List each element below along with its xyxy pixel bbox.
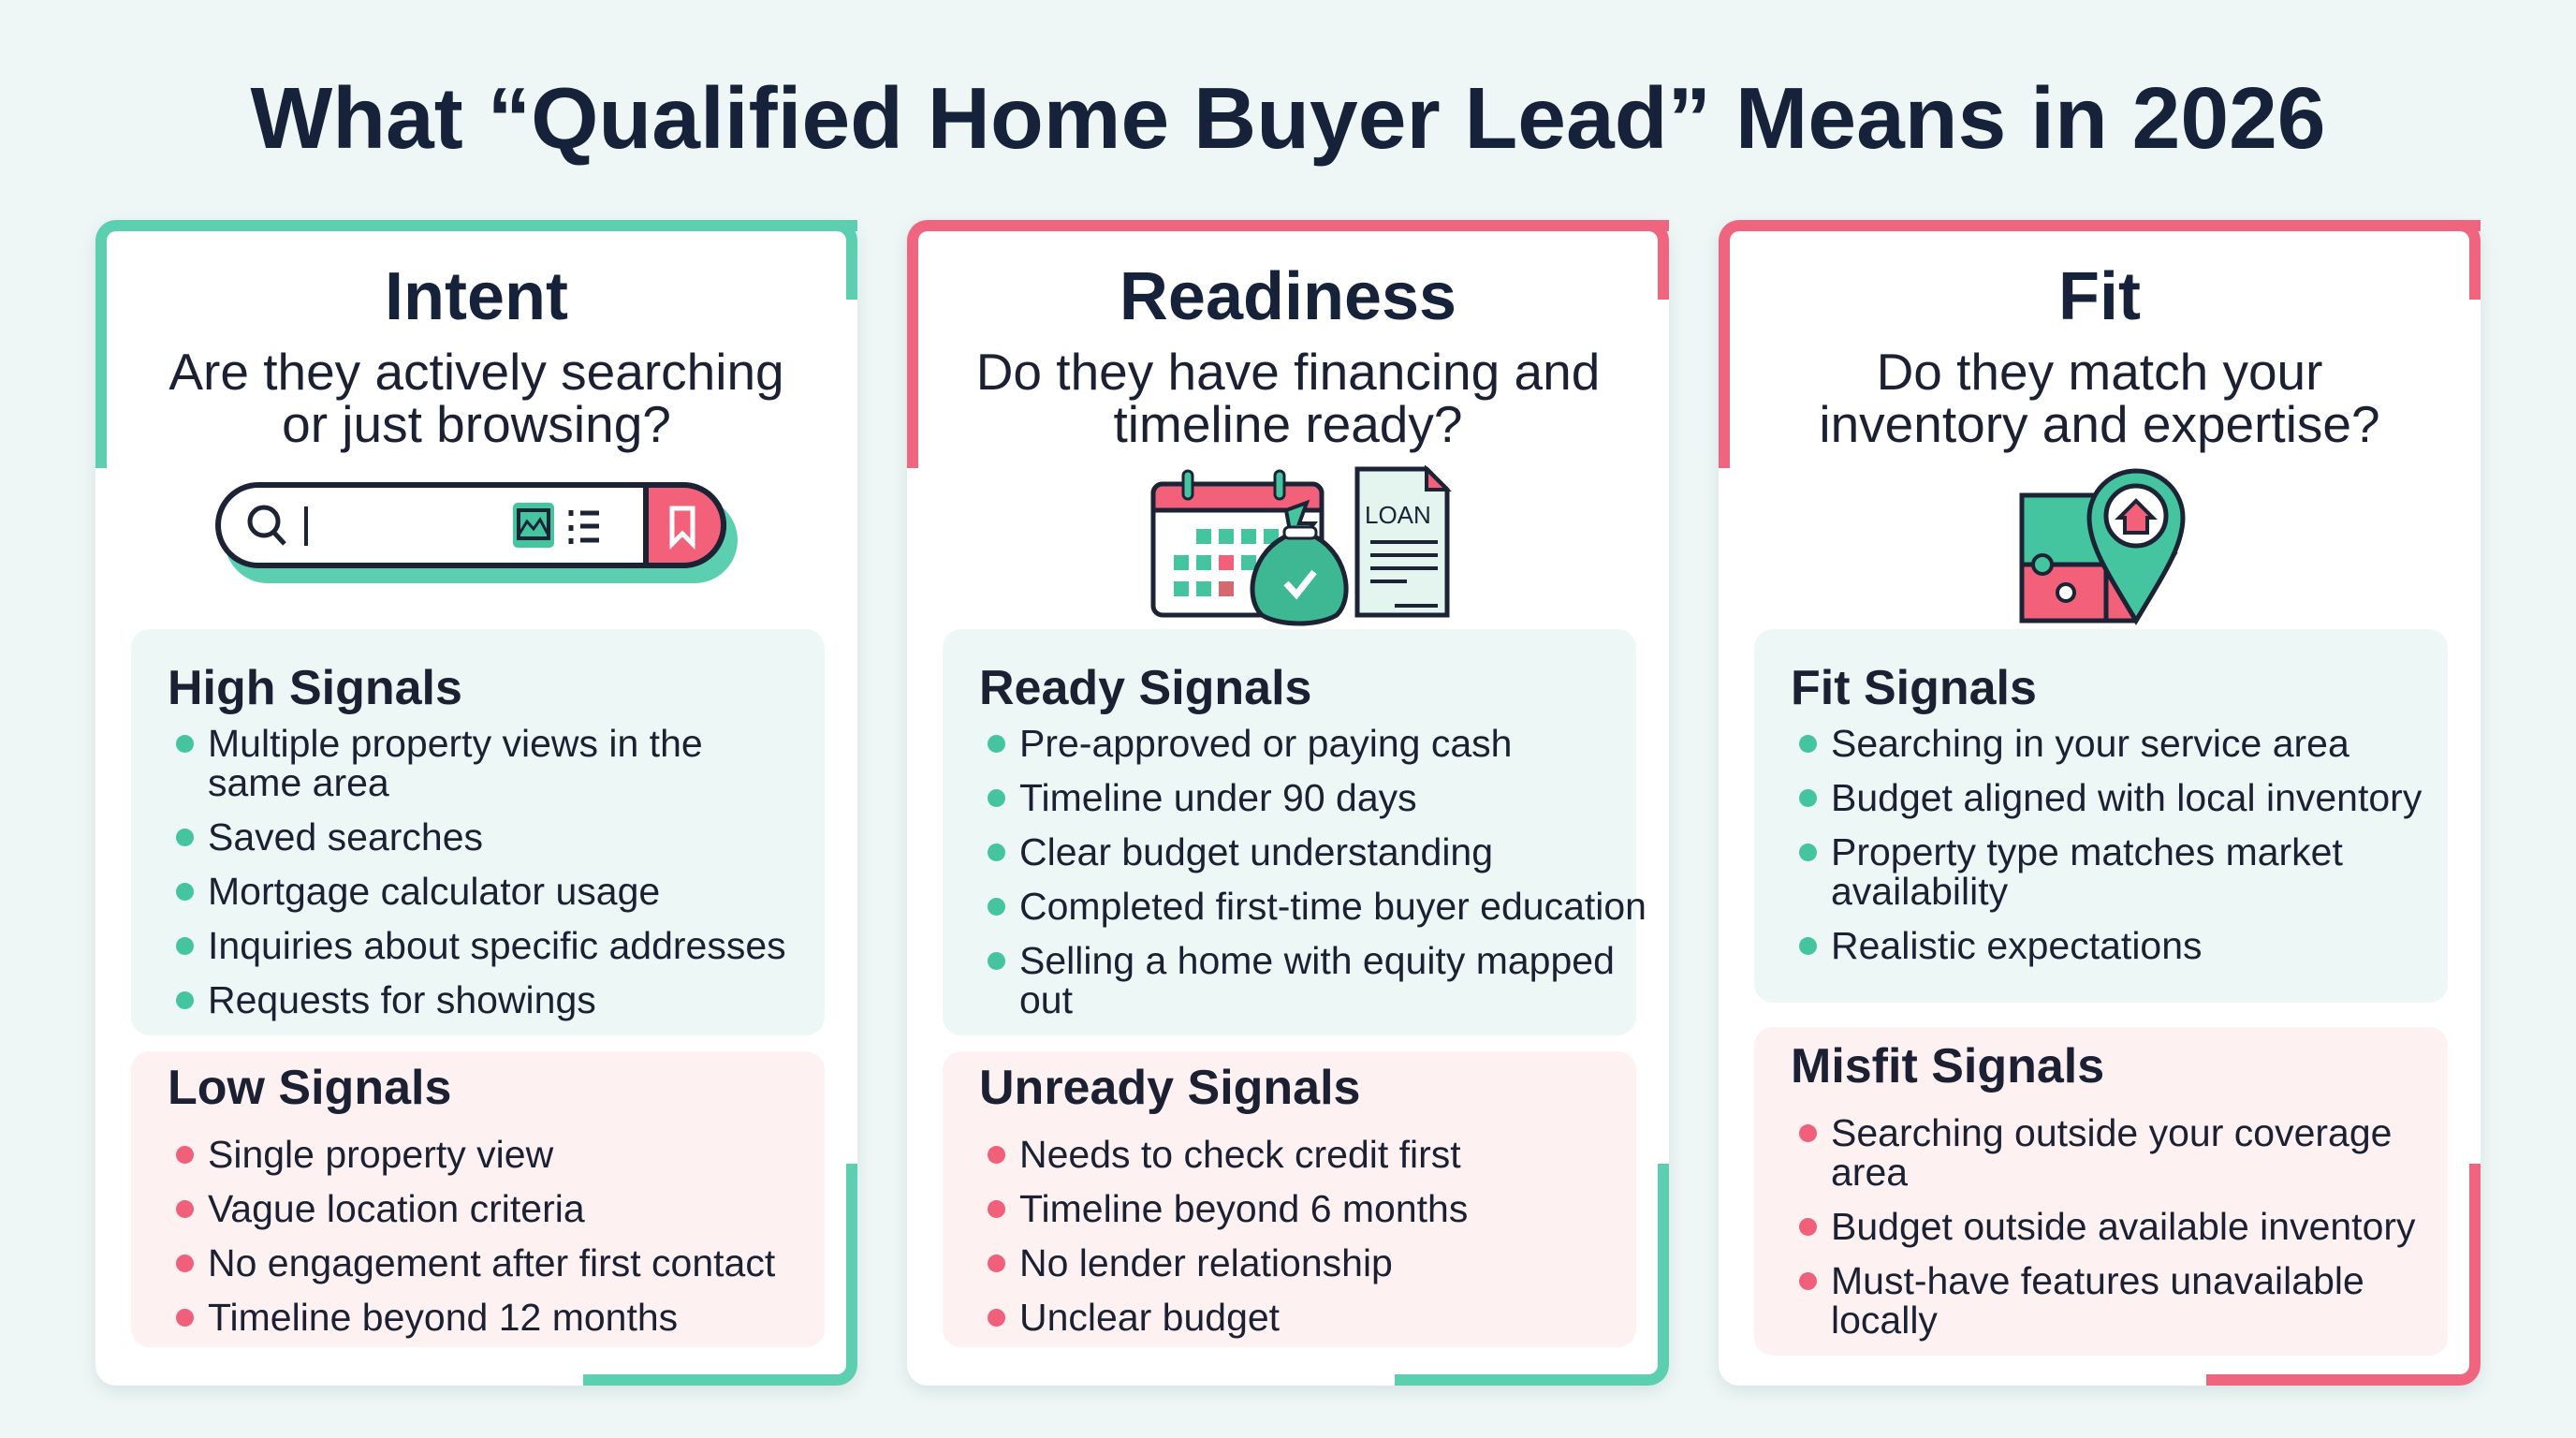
box: low signals: Vague location criteria	[208, 1187, 585, 1230]
box: high signals: Inquiries about specific addresses	[208, 924, 786, 967]
subtitle: fit: inventory and expertise?	[1819, 395, 2380, 453]
box: low signals: Low Signals	[168, 1061, 451, 1115]
subtitle: readiness	[976, 343, 1600, 453]
subtitle: readiness: Do they have financing and	[976, 343, 1600, 401]
icon: puzzle and location pin	[2020, 468, 2185, 625]
panel: fit	[1719, 220, 2481, 1386]
box: low signals: Timeline beyond 12 months	[208, 1296, 678, 1339]
subtitle: fit: Do they match your	[1877, 343, 2322, 401]
icon: calendar, money bag, loan: LOAN	[1365, 501, 1431, 529]
box: fit signals: Fit Signals	[1791, 661, 2037, 715]
subtitle: intent: Are they actively searching	[168, 343, 784, 401]
box: high signals: High Signals	[168, 661, 462, 715]
box: high signals: Multiple property views in the	[208, 722, 703, 765]
box: high signals	[131, 629, 825, 1035]
box: low signals: No engagement after first contact	[208, 1241, 775, 1284]
title: What “Qualified Home Buyer Lead” Means in 2026	[250, 69, 2326, 167]
box: misfit signals: area	[1831, 1151, 1908, 1194]
box: fit signals	[1754, 629, 2448, 1003]
box: high signals: Requests for showings	[208, 978, 596, 1021]
box: unready signals: Needs to check credit first	[1019, 1133, 1461, 1176]
subtitle: intent: or just browsing?	[282, 395, 671, 453]
box: unready signals: No lender relationship	[1019, 1241, 1393, 1284]
box: ready signals: Selling a home with equity mapped	[1019, 939, 1615, 982]
box: unready signals: Unready Signals	[979, 1061, 1360, 1115]
subtitle: fit	[1819, 343, 2380, 453]
box: fit signals: Property type matches market	[1831, 830, 2343, 873]
box: ready signals: Clear budget understanding	[1019, 830, 1493, 873]
box: high signals: Saved searches	[208, 815, 483, 858]
panel: intent	[95, 220, 857, 1386]
box: misfit signals: locally	[1831, 1299, 1938, 1342]
box: fit signals: Searching in your service area	[1831, 722, 2349, 765]
icon: calendar, money bag, loan	[1151, 465, 1452, 625]
panel: readiness	[907, 220, 1669, 1386]
box: unready signals: Unclear budget	[1019, 1296, 1280, 1339]
box: unready signals: Timeline beyond 6 months	[1019, 1187, 1468, 1230]
box: unready signals	[943, 1051, 1636, 1347]
icon: search bar	[215, 482, 738, 583]
subtitle: readiness: timeline ready?	[1114, 395, 1462, 453]
heading: fit: Fit	[2058, 259, 2141, 334]
box: ready signals: Ready Signals	[979, 661, 1311, 715]
box: misfit signals: Budget outside available inventory	[1831, 1205, 2416, 1248]
box: ready signals: out	[1019, 978, 1073, 1021]
box: ready signals: Completed first-time buyer education	[1019, 885, 1647, 928]
box: ready signals	[943, 629, 1636, 1035]
box: misfit signals: Searching outside your coverage	[1831, 1111, 2392, 1154]
subtitle: intent	[168, 343, 784, 453]
box: fit signals: Budget aligned with local inventory	[1831, 776, 2422, 819]
box: low signals	[131, 1051, 825, 1347]
box: ready signals: Pre-approved or paying cash	[1019, 722, 1512, 765]
box: high signals: same area	[208, 761, 389, 804]
box: fit signals: Realistic expectations	[1831, 924, 2203, 967]
box: high signals: Mortgage calculator usage	[208, 870, 660, 913]
heading: readiness: Readiness	[1120, 259, 1456, 334]
box: ready signals: Timeline under 90 days	[1019, 776, 1417, 819]
box: misfit signals: Must-have features unavailable	[1831, 1259, 2364, 1302]
box: misfit signals: Misfit Signals	[1791, 1039, 2104, 1093]
box: fit signals: availability	[1831, 870, 2008, 913]
heading: intent: Intent	[385, 259, 568, 334]
box: low signals: Single property view	[208, 1133, 553, 1176]
box: misfit signals	[1754, 1027, 2448, 1356]
